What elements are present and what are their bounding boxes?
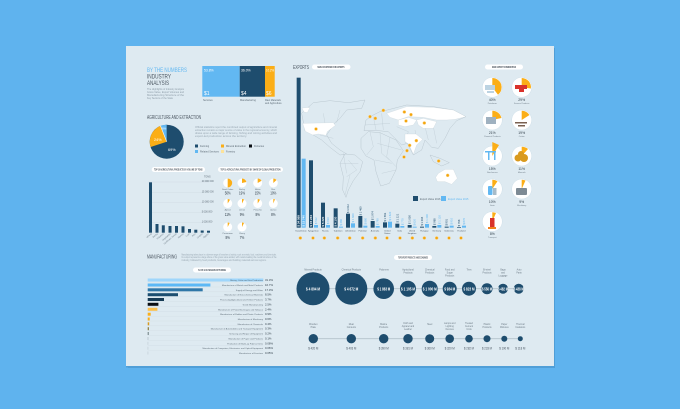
- bar chart: manufacturing: 17.3%: [265, 288, 273, 292]
- bar chart: agricultural products: Vegetables: [161, 232, 172, 242]
- bubble chart: top exports row 2: Marine: [380, 323, 388, 326]
- bubble chart: top exports row 1: Chemical Products: [342, 268, 362, 272]
- small share pies: 10%: [270, 190, 276, 196]
- bubble chart: top exports row 2: $ 320 M: [445, 346, 455, 350]
- bar chart: exports by country: Thailand: [457, 230, 466, 232]
- bar chart: exports by country: $ 2 460: [358, 206, 362, 215]
- bubble chart: top exports row 1: Auto: [517, 268, 522, 272]
- icon group: export commodities: 8%: [490, 232, 495, 236]
- stacked sector bar: $6: [266, 91, 272, 97]
- bubble chart: top exports row 2: Insulators: [515, 326, 526, 329]
- icon group: export commodities: 9%: [519, 200, 524, 204]
- bar chart: agricultural products: TONS: [204, 176, 211, 178]
- small share pies: 11%: [225, 212, 231, 217]
- bubble chart: top exports row 2: Mixtures: [500, 326, 509, 329]
- bar chart: agricultural products: 15 000 000: [202, 190, 214, 193]
- bubble chart: top exports row 2: [308, 322, 526, 350]
- bubble chart: top exports row 2: $ 282 M: [464, 346, 474, 350]
- bar chart: exports by country: States: [384, 232, 390, 235]
- heading: agriculture and extraction: AGRICULTURE AND EXTRACTION: [147, 115, 201, 121]
- bubble chart: top exports row 1: $ 823 M: [464, 286, 475, 291]
- bubble chart: top exports row 1: Products: [482, 272, 492, 274]
- bubble chart: top exports row 1: Chemical: [425, 270, 435, 272]
- bar chart: manufacturing: Manufacture of Metals and Metal Products: [222, 284, 264, 287]
- icon group: export commodities: Non-ferrous: [487, 172, 498, 174]
- bubble chart: top exports row 1: $ 934 M: [444, 286, 455, 291]
- icon group: export commodities: 19%: [518, 131, 525, 135]
- pill: exports chart: MAIN COUNTRIES FOR EXPORTS: [318, 65, 345, 69]
- bar chart: exports by country: $ 512: [314, 217, 318, 224]
- heading: exports: EXPORTS: [293, 65, 309, 71]
- bubble chart: top exports row 2: Paper: [501, 323, 508, 326]
- bar chart: manufacturing: Textile Manufacturing: [242, 303, 264, 306]
- bubble chart: top exports row 1: $ 482 M: [498, 286, 508, 291]
- bubble chart: top exports row 1: [296, 268, 524, 305]
- bubble chart: top exports row 2: Cloth and: [403, 322, 414, 325]
- bubble chart: top exports row 1: $ 1 863 M: [377, 286, 390, 291]
- bubble chart: top exports row 2: Products: [482, 326, 492, 329]
- agriculture text block: extraction remains a major source of value in the regional economy, which: [195, 128, 277, 132]
- bar chart: agricultural products: Grapes: [196, 232, 204, 239]
- manufacturing text block: [182, 252, 277, 262]
- pie chart: agriculture: 24%: [154, 138, 162, 142]
- icon group: export commodities: Transport: [488, 236, 497, 239]
- heading: manufacturing: MANUFACTURING: [147, 254, 177, 260]
- bubble chart: top exports row 1: Parts: [516, 272, 523, 274]
- bubble chart: top exports row 1: $ 556 M: [482, 286, 492, 291]
- pie legend: Fisheries: [254, 145, 265, 148]
- small share pies: Barley: [239, 189, 245, 191]
- bar chart: exports by country: $ 901: [445, 218, 449, 226]
- bar chart: manufacturing: Manufacture of Furniture: [239, 352, 264, 355]
- bubble chart: top exports row 1: Luggage: [499, 276, 508, 278]
- bar chart: manufacturing: Mining, Coke and Gas Production: [230, 279, 264, 282]
- small share pies: Rice: [271, 189, 276, 191]
- exports legend: [413, 196, 469, 201]
- bubble chart: top exports row 2: Treated: [465, 322, 474, 325]
- pie chart: agriculture: 6%: [162, 126, 167, 130]
- bubble chart: top exports row 2: Leather: [404, 328, 412, 331]
- bar chart: exports by country: $ 5 220: [321, 216, 325, 227]
- bar chart: manufacturing: 31.3%: [265, 278, 273, 282]
- bubble chart: top exports row 2: Products: [379, 326, 389, 329]
- bubble chart: top exports row 2: Cement: [465, 325, 473, 328]
- pill: share of exports: MAIN EXPORT COMMODITIES: [492, 65, 516, 69]
- bubble chart: top exports row 1: $ 438 M: [514, 286, 524, 291]
- bubble chart: top exports row 2: Meat: [349, 323, 354, 326]
- bar chart: exports by country: [295, 78, 466, 239]
- bubble chart: top exports row 2: $ 190 M: [499, 346, 509, 350]
- small share pies: 7%: [240, 235, 244, 240]
- stacked sector bar: Services: [203, 99, 213, 102]
- heading: by the numbers: [147, 67, 187, 87]
- bar chart: agricultural products: Rice: [192, 233, 197, 238]
- icon group: export commodities: 11%: [518, 167, 525, 171]
- pill: top agricultural products by value: TOP 10 AGRICULTURAL PRODUCTS BY SHARE OF GLOBAL PRODUCTION: [220, 168, 280, 172]
- bar chart: manufacturing: 0.06%: [265, 346, 273, 350]
- small share pies: [222, 178, 278, 240]
- pie legend: Farming: [200, 145, 210, 148]
- bar chart: manufacturing: 0.3%: [265, 327, 272, 331]
- small share pies: Persimmon: [223, 233, 233, 235]
- bar chart: exports by country: $ 1 004: [420, 216, 424, 226]
- bar chart: manufacturing: Manufacture of Machinery: [238, 318, 264, 321]
- bar chart: exports by country: Kingdom: [408, 233, 416, 235]
- small share pies: Lemon: [239, 210, 245, 212]
- icon group: export commodities: 40%: [489, 98, 496, 102]
- icon group: export commodities: 29%: [518, 98, 525, 102]
- stacked sector bar: $4: [241, 91, 247, 97]
- pill: top agricultural products by value: [218, 167, 283, 172]
- bar chart: manufacturing: 0.2%: [265, 332, 272, 336]
- bar chart: exports by country: $ 1 563: [383, 212, 387, 222]
- bar chart: exports by country: $ 15 740: [302, 215, 306, 227]
- intro text block: [147, 87, 184, 100]
- intro text block: Gross Value, Export Volumes and: [147, 90, 184, 94]
- icon group: export commodities: 15%: [489, 167, 496, 171]
- pill: manufacturing chart: [193, 268, 231, 272]
- bar chart: manufacturing: Manufacture of Rubber and Plastic Products: [220, 313, 264, 316]
- bar chart: exports by country: $ 1 120: [437, 215, 441, 224]
- bar chart: exports by country: $ 1 050: [408, 215, 412, 224]
- bar chart: manufacturing: Manufacture of Automobiles and Transport Equipment: [211, 328, 263, 331]
- bar chart: exports by country: $ 620: [413, 218, 417, 226]
- small share pies: 9%: [240, 212, 244, 217]
- bar chart: exports by country: $ 770: [400, 218, 404, 225]
- bar chart: manufacturing: 0.6%: [265, 317, 272, 321]
- small share pies: 8%: [255, 212, 260, 217]
- icon group: export commodities: Grain: [490, 205, 495, 207]
- small share pies: Apricot: [225, 208, 231, 212]
- bubble chart: top exports row 1: Tires: [466, 268, 472, 272]
- bar chart: agricultural products: Melons: [178, 233, 185, 239]
- bar chart: agricultural products: 1 000 000: [202, 221, 213, 224]
- bar chart: manufacturing: Manufacture of Non-Chemical Materials: [224, 294, 264, 297]
- bar chart: exports by country: Indonesia: [444, 230, 454, 232]
- pill: manufacturing chart: % OF GVA MANUFACTURING: [198, 268, 226, 272]
- bar chart: exports by country: $ 1 221: [395, 213, 399, 223]
- icon group: export commodities: 10%: [489, 200, 496, 204]
- icon: camera case: [516, 188, 527, 195]
- bar chart: exports by country: Hungary: [420, 229, 429, 232]
- bar chart: exports by country: $ 1 820: [388, 211, 392, 221]
- bar chart: manufacturing: Servicing and Repair of Equipment: [229, 332, 263, 336]
- pie legend: Related Services: [200, 151, 220, 154]
- icon: red machinery: [515, 85, 527, 92]
- stacked sector bar: $1: [204, 91, 210, 97]
- bubble chart: top exports row 2: $ 420 M: [308, 346, 318, 350]
- bar chart: manufacturing: 0.1%: [265, 336, 272, 340]
- bubble chart: top exports row 2: Plastic: [484, 323, 491, 326]
- manufacturing text block: Manufacturing takes place in a diverse range of branches of activity, such as metals, food, machinery and chemicals.: [182, 252, 277, 256]
- agriculture text block: export-led production across the territory.: [195, 134, 247, 138]
- icon: pipes: [485, 85, 495, 93]
- bubble chart: top exports row 2: $ 118 M: [515, 346, 525, 350]
- icon group: export commodities: Minerals: [518, 172, 525, 174]
- bar chart: manufacturing: 0.08%: [265, 341, 273, 345]
- bar chart: agricultural products: Barley: [152, 232, 159, 239]
- icon group: export commodities: Cotton: [519, 135, 525, 138]
- bar chart: manufacturing: 0.4%: [265, 322, 272, 326]
- bubble chart: top exports row 2: $ 390 M: [379, 346, 389, 350]
- agriculture text block: Official statistics report the combined output of agriculture and mineral: [195, 125, 277, 129]
- icon group: export commodities: [482, 77, 532, 239]
- pie legend: Mineral Extraction: [226, 145, 247, 148]
- bar chart: exports by country: $ 988: [432, 218, 436, 225]
- bar chart: exports by country: $ 480: [339, 218, 343, 226]
- manufacturing text block: Its output represents a large share of the gross value added, with metals leading the overall structure of the: [182, 255, 277, 259]
- bar chart: exports by country: Pakistan: [359, 229, 368, 232]
- bubble chart: top exports row 2: $ 381 M: [403, 346, 413, 350]
- pill: top export products: TOP EXPORT PRODUCTS AND ECONOMIES: [398, 256, 428, 260]
- bar chart: manufacturing: 3.7%: [265, 298, 272, 302]
- bar chart: manufacturing: 16.7%: [265, 283, 273, 287]
- bubble chart: top exports row 2: Units: [466, 328, 472, 331]
- bubble chart: top exports row 2: Wooden: [309, 324, 318, 326]
- stacked sector bar: Manufacturing: [240, 99, 256, 102]
- bar chart: exports by country: $ 768: [457, 219, 461, 226]
- bar chart: manufacturing: [148, 278, 273, 355]
- bubble chart: top exports row 1: Products: [403, 272, 413, 274]
- bar chart: exports by country: United: [384, 229, 391, 232]
- small share pies: 19%: [239, 190, 245, 196]
- bubble chart: top exports row 1: Products: [425, 272, 435, 274]
- small share pies: 15%: [255, 190, 261, 196]
- world map: [302, 100, 466, 197]
- small share pies: Quince: [270, 210, 277, 212]
- bar chart: exports by country: $ 15 244: [309, 215, 313, 227]
- exports legend: Export Value 2015: [448, 198, 469, 201]
- bar chart: exports by country: Australia: [371, 229, 380, 232]
- bar chart: agricultural products: [146, 176, 214, 245]
- bubble chart: top exports row 2: Lamps and: [444, 323, 456, 325]
- bar chart: manufacturing: Production of Made-up Fabrics Items: [227, 342, 264, 345]
- stacked sector bar: and Agriculture: [265, 102, 282, 105]
- bar chart: exports by country: Kazakhstan: [295, 229, 307, 232]
- bar chart: exports by country: $ 790: [376, 218, 380, 225]
- bubble chart: top exports row 1: Bi-steel: [483, 268, 491, 272]
- intro text block: Manufacturing Structure of the: [147, 93, 184, 97]
- bar chart: exports by country: $ 870: [462, 217, 466, 225]
- bubble chart: top exports row 2: Thermal: [516, 323, 525, 326]
- manufacturing text block: industry, followed by food products, beverages and building materials across regions.: [182, 258, 267, 262]
- pie legend: Forestry: [226, 151, 236, 154]
- bubble chart: top exports row 2: Apparel and: [402, 325, 415, 328]
- bar chart: exports by country: $ 910: [326, 217, 330, 224]
- bar chart: manufacturing: 8.5%: [265, 293, 272, 297]
- heading: by the numbers: INDUSTRY: [147, 74, 171, 80]
- bar chart: exports by country: $ 3 012: [346, 204, 350, 213]
- pie legend: [195, 144, 265, 154]
- pill: top agricultural products chart: TOP 10 AGRICULTURAL PRODUCTS BY VOLUME OF TONS: [154, 168, 203, 172]
- small share pies: 50%: [225, 190, 231, 196]
- bubble chart: top exports row 2: Plate: [311, 326, 317, 329]
- bar chart: exports by country: $ 880: [363, 217, 367, 225]
- bubble chart: top exports row 2: $ 403 M: [346, 346, 356, 350]
- bar chart: exports by country: United: [409, 229, 416, 232]
- bar chart: manufacturing: Manufacture of Chemicals: [238, 323, 264, 326]
- heading: by the numbers: BY THE NUMBERS: [147, 67, 187, 74]
- bar chart: manufacturing: 0.05%: [265, 351, 273, 355]
- bar chart: exports by country: $ 910: [450, 217, 454, 225]
- stacked sector bar: 36.0%: [241, 68, 251, 72]
- bubble chart: top exports row 1: $ 1 000 M: [423, 286, 437, 291]
- exports legend: Export Value 2016: [420, 198, 441, 201]
- bubble chart: top exports row 1: $ 4 672 M: [344, 286, 358, 292]
- bar chart: exports by country: Uzbekistan: [345, 229, 356, 232]
- agriculture text block: draws upon a wide range of farming, fishing and mining activities and: [195, 131, 277, 135]
- bar chart: exports by country: Germany: [432, 229, 442, 232]
- bubble chart: top exports row 2: $ 233 M: [482, 346, 492, 350]
- bar chart: exports by country: India: [397, 230, 403, 232]
- bubble chart: top exports row 1: Products: [445, 274, 455, 278]
- icon: gold pile: [514, 151, 528, 162]
- small share pies: 8%: [271, 212, 276, 217]
- bubble chart: top exports row 1: Polymers: [379, 268, 390, 272]
- bubble chart: top exports row 1: $ 1 105 M: [401, 286, 415, 291]
- icon: blue bottle: [488, 186, 496, 195]
- bubble chart: top exports row 1: Mineral Products: [304, 268, 322, 272]
- bar chart: manufacturing: Manufacture of Food, Beverages and Tobacco: [218, 308, 264, 311]
- intro text block: Key Sectors of the State: [147, 96, 173, 100]
- icon group: export commodities: Petroleum: [488, 102, 497, 105]
- bar chart: manufacturing: Manufacture of Paper and Products: [228, 338, 264, 340]
- intro text block: The Highlights of Industry Analysis: [147, 87, 184, 91]
- bubble chart: top exports row 1: and: [501, 272, 506, 274]
- agriculture text block: [195, 125, 277, 138]
- bar chart: agricultural products: Wheat: [146, 232, 153, 239]
- bubble chart: top exports row 2: $ 360 M: [425, 346, 435, 350]
- bar chart: manufacturing: 0.9%: [265, 312, 272, 316]
- bar chart: manufacturing: 2.5%: [265, 302, 272, 306]
- icon group: export commodities: Chemical Products: [484, 135, 501, 138]
- heading: by the numbers: ANALYSIS: [147, 80, 169, 87]
- small share pies: Seed Cotton: [222, 188, 233, 191]
- bar chart: exports by country: $ 4 100: [334, 216, 338, 227]
- bubble chart: top exports row 2: Contents: [347, 326, 357, 329]
- bar chart: manufacturing: Supply of Energy and Water: [236, 289, 263, 292]
- pill: exports chart: [312, 64, 350, 70]
- icon: chemicals: [486, 117, 496, 124]
- bar chart: exports by country: Russia: [322, 230, 329, 232]
- icon group: export commodities: 21%: [489, 131, 496, 135]
- bar chart: agricultural products: 10 000 000: [202, 200, 214, 204]
- bar chart: exports by country: $ 1 400: [425, 214, 429, 223]
- bubble chart: top exports row 1: Bags: [500, 270, 506, 272]
- bar chart: exports by country: $ 1 974: [371, 211, 375, 220]
- bubble chart: top exports row 2: Devices: [446, 329, 455, 331]
- bar chart: agricultural products: Apples: [203, 232, 210, 239]
- stacked sector bar: [202, 66, 282, 105]
- bubble chart: top exports row 1: $ 4 804 M: [306, 286, 320, 292]
- icon group: export commodities: Machinery: [517, 205, 526, 207]
- stacked sector bar: Raw Materials: [265, 99, 282, 102]
- bar chart: agricultural products: Corn: [185, 232, 191, 238]
- stacked sector bar: 53.8%: [204, 68, 214, 72]
- pie chart: agriculture: [150, 125, 184, 159]
- bar chart: agricultural products: Potatoes: [156, 232, 165, 240]
- bubble chart: top exports row 2: Steel: [427, 323, 433, 326]
- bar chart: agricultural products: Sunflower Seeds: [163, 232, 178, 245]
- bubble chart: top exports row 1: Sugar: [447, 272, 453, 274]
- bar chart: exports by country: Tajikistan: [334, 229, 343, 232]
- bar chart: manufacturing: Processing Agricultural and Timber Products: [220, 298, 264, 302]
- icon group: export commodities: Ferrous Products: [514, 102, 529, 105]
- small share pies: Cherry: [239, 233, 245, 235]
- pill: top agricultural products chart: [152, 167, 205, 172]
- pill: share of exports: [485, 64, 523, 70]
- stacked sector bar: 10.2%: [266, 68, 274, 72]
- icon: red tower: [488, 218, 496, 229]
- bar chart: manufacturing: Manufacture of Computers, Electronics and Optical Equipment: [202, 347, 263, 350]
- pill: top export products: [394, 255, 432, 260]
- icon: wind towers: [485, 151, 496, 160]
- icon: cotton: [515, 122, 527, 126]
- bar chart: agricultural products: 5 000 000: [202, 211, 213, 214]
- small share pies: Melon: [255, 189, 260, 191]
- bubble chart: top exports row 2: Lighting: [446, 325, 454, 328]
- pie chart: agriculture: 69%: [168, 148, 176, 152]
- small share pies: Pistachio: [254, 208, 263, 212]
- bubble chart: top exports row 1: Agricultural: [402, 268, 414, 272]
- bar chart: exports by country: $ 34 569: [297, 215, 301, 227]
- bubble chart: top exports row 1: Food and: [445, 270, 455, 272]
- poster panel: [126, 46, 555, 368]
- bar chart: agricultural products: 20 000 000: [202, 180, 214, 183]
- bar chart: exports by country: Kyrgyzstan: [308, 229, 319, 232]
- bar chart: exports by country: $ 1 600: [351, 213, 355, 222]
- small share pies: 8%: [225, 235, 230, 240]
- bar chart: manufacturing: 2.4%: [265, 307, 272, 311]
